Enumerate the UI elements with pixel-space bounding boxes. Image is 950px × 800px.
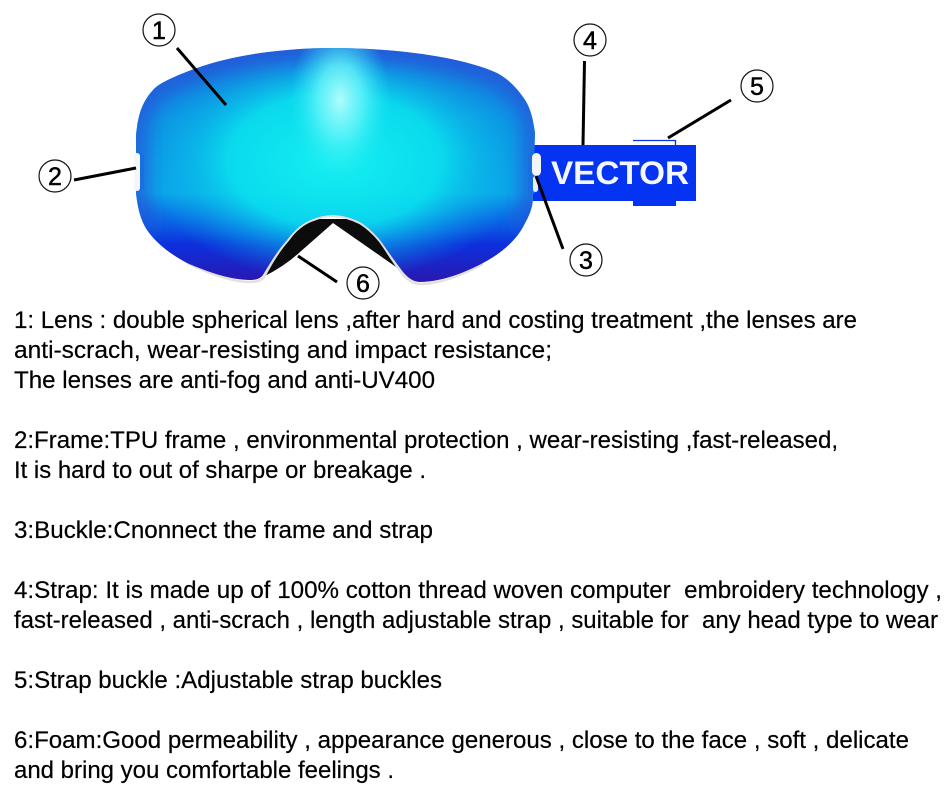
description: foam: and bring you comfortable feelings .	[14, 757, 394, 784]
left clip	[134, 152, 144, 191]
callout 4: 4	[583, 27, 597, 55]
callout 6: 6	[356, 270, 370, 298]
description: foam	[14, 727, 909, 784]
callout 6	[298, 256, 379, 299]
description: foam: 6:Foam:Good permeability , appearance generous , close to the face , soft , delicate	[14, 727, 909, 754]
strap buckle	[633, 140, 676, 145]
description: buckle: 3:Buckle:Cnonnect the frame and strap	[14, 517, 433, 544]
description: strap: fast-released , anti-scrach , length adjustable strap , suitable for any head type to wear	[14, 607, 938, 634]
callout 3	[536, 176, 602, 276]
goggles illustration	[130, 40, 696, 290]
description: lens	[14, 307, 857, 394]
right clip	[528, 152, 541, 194]
foam	[263, 219, 399, 277]
description: frame	[14, 427, 838, 484]
description: lens: The lenses are anti-fog and anti-UV400	[14, 367, 435, 394]
callout 5	[668, 70, 773, 138]
white frame edge	[187, 216, 483, 284]
callout 1	[143, 14, 226, 105]
lens	[130, 40, 540, 290]
description: lens: 1: Lens : double spherical lens ,after hard and costing treatment ,the lenses are	[14, 307, 857, 334]
callout 4	[574, 24, 606, 145]
description: strap	[14, 577, 942, 634]
callout 3: 3	[579, 247, 593, 275]
description: strap: 4:Strap: It is made up of 100% cotton thread woven computer embroidery technology ,	[14, 577, 942, 604]
description: lens: anti-scrach, wear-resisting and impact resistance;	[14, 337, 552, 364]
callout 5: 5	[750, 73, 764, 101]
callout 2: 2	[48, 163, 62, 191]
callout 2	[39, 160, 136, 192]
brand text: VECTOR	[551, 155, 689, 191]
strap with brand	[533, 140, 696, 206]
description: frame: 2:Frame:TPU frame , environmental protection , wear-resisting ,fast-released,	[14, 427, 838, 454]
description: strap buckle: 5:Strap buckle :Adjustable strap buckles	[14, 667, 442, 694]
description: frame: It is hard to out of sharpe or breakage .	[14, 457, 426, 484]
callout 1: 1	[152, 17, 166, 45]
